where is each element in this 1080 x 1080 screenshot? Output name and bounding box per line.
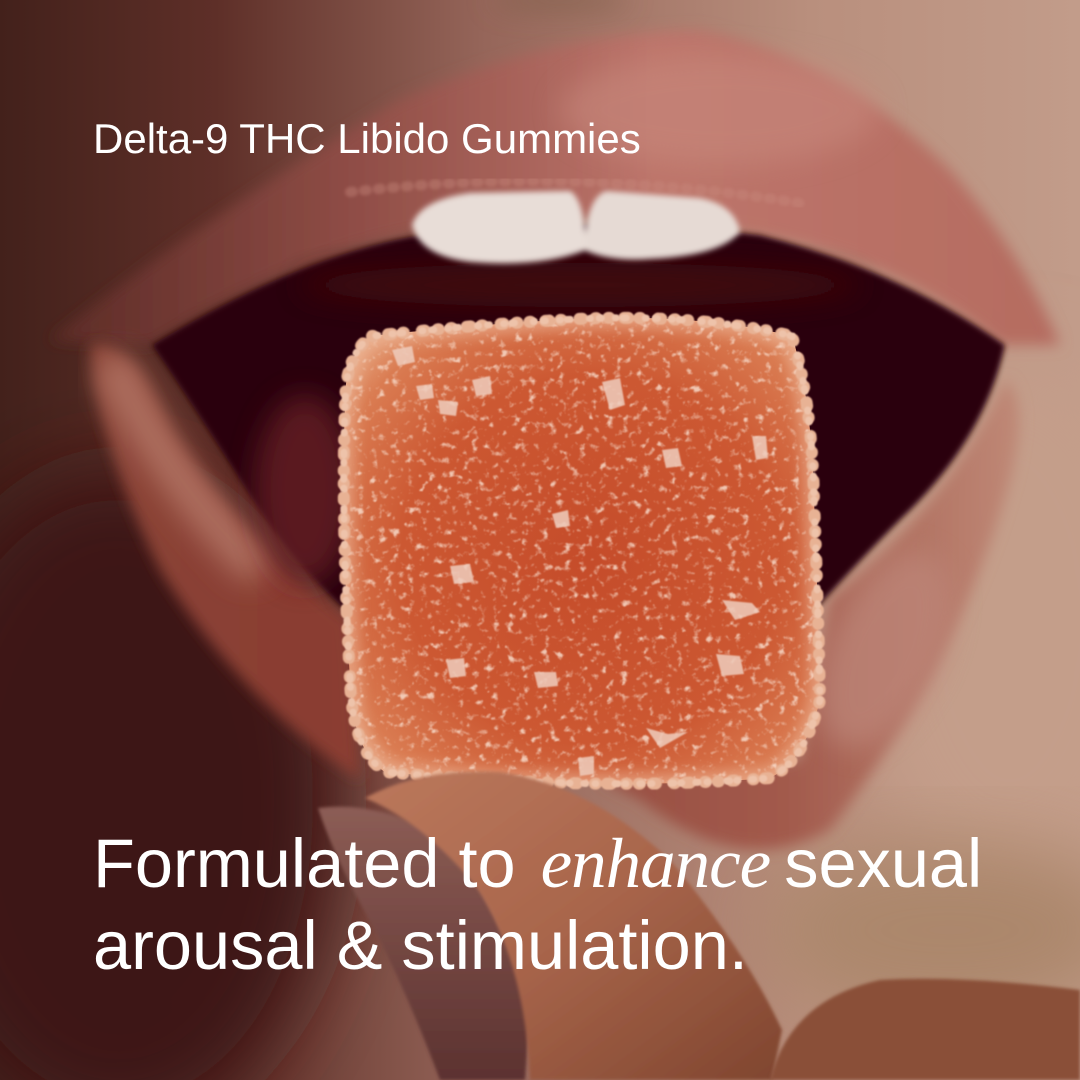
headline: arousal & stimulation. <box>93 907 748 984</box>
gummy body <box>344 318 820 784</box>
gummy <box>335 305 830 795</box>
teeth <box>412 191 740 264</box>
lower lip <box>90 344 1019 849</box>
lower lip highlight left <box>118 375 250 560</box>
sugar texture <box>346 319 816 783</box>
headline: Formulated to enhance sexual <box>93 825 982 903</box>
skin bottom right <box>760 840 1080 1020</box>
nose shadow <box>490 0 630 10</box>
mouth cavity <box>152 225 1005 610</box>
lower finger <box>770 979 1080 1080</box>
eyebrow text: Delta-9 THC Libido Gummies <box>93 115 641 162</box>
tongue glow <box>255 395 355 585</box>
cheek right <box>850 360 1080 880</box>
sugar crystals <box>392 346 768 776</box>
lower lip highlight right <box>791 532 979 768</box>
frosted rim <box>344 318 820 784</box>
upper cavity glow <box>300 263 860 307</box>
lip highlight <box>560 55 880 165</box>
fingers <box>318 772 1080 1080</box>
cheek bottom left <box>0 470 340 1080</box>
lip ridge <box>350 181 810 205</box>
upper lip <box>50 30 1060 345</box>
headline <box>93 825 982 984</box>
nail <box>318 807 530 1080</box>
granular edge inner <box>344 318 820 784</box>
finger tip <box>365 772 782 1080</box>
granular edge outer <box>344 318 820 784</box>
